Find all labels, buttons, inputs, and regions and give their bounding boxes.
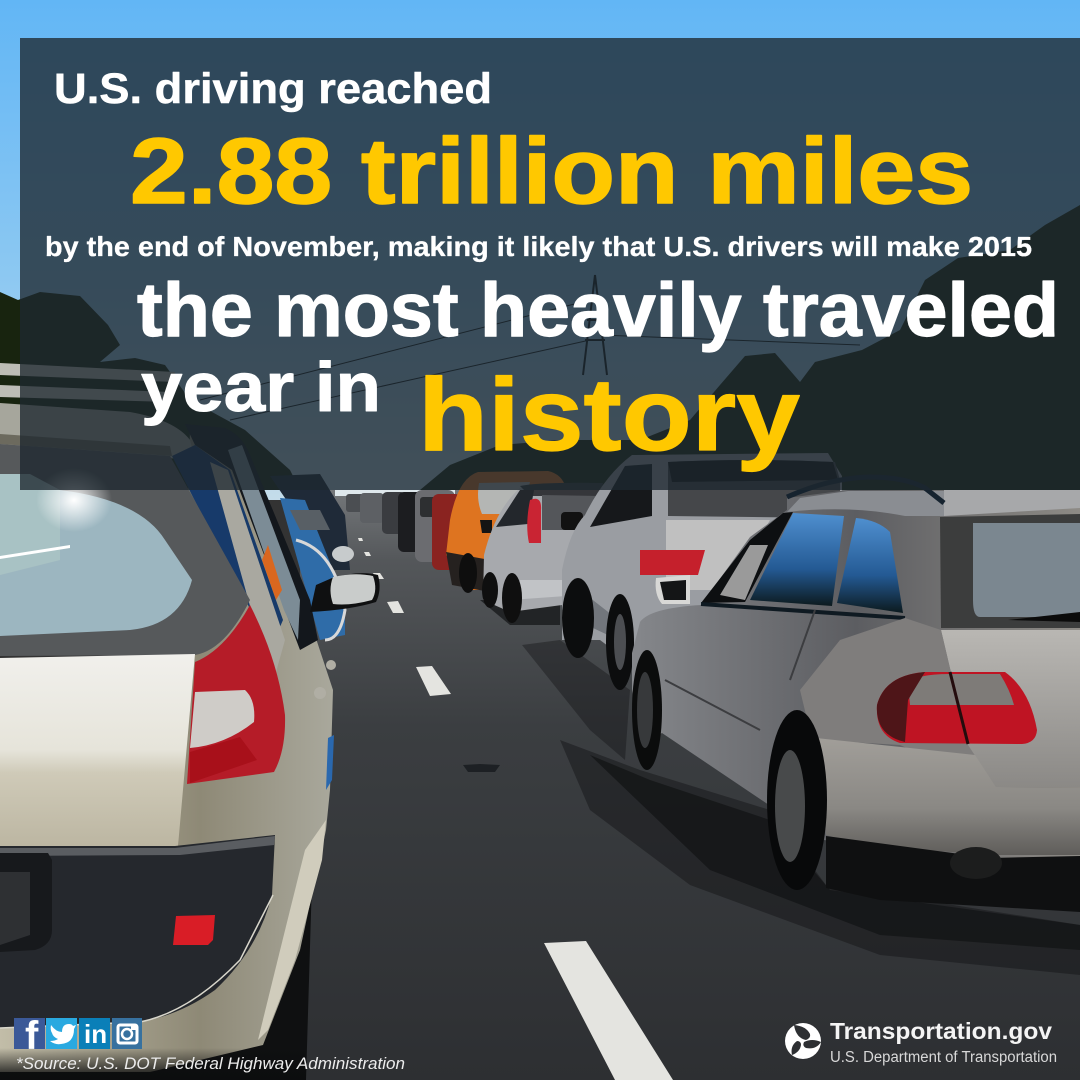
dark fade at bottom of left car [0, 1048, 306, 1080]
bright side reflection [258, 820, 326, 1040]
wheels [632, 650, 662, 770]
under-bumper [826, 836, 1080, 912]
orange van [446, 471, 566, 593]
sun glare [36, 468, 112, 532]
red reflector [173, 915, 215, 945]
big statistic: 2.88 trillion miles [130, 119, 973, 223]
side windows [750, 513, 844, 606]
shadows on road [480, 600, 1080, 975]
quarter panel [800, 618, 996, 787]
roof [0, 403, 195, 460]
wing mirror [310, 573, 380, 612]
source note: *Source: U.S. DOT Federal Highway Administration [16, 1055, 405, 1073]
tail light [187, 605, 285, 784]
website name: Transportation.gov [830, 1018, 1052, 1044]
far horizon strip [335, 490, 455, 496]
department name: U.S. Department of Transportation [830, 1049, 1057, 1066]
sky [0, 0, 1080, 500]
roof rail [787, 477, 944, 503]
distant cars right lane [346, 490, 462, 570]
tailgate [941, 630, 1080, 787]
bumper lower line [0, 895, 273, 1028]
logo: Transportation.gov [785, 1018, 1057, 1066]
roof [787, 491, 944, 516]
blue reflection [326, 735, 334, 790]
road [300, 490, 1080, 1080]
mid grey SUV [562, 453, 842, 690]
left car [0, 363, 336, 1072]
road dashes [358, 538, 673, 1080]
title text [45, 65, 1059, 472]
heading line 2: the most heavily traveled [137, 268, 1059, 353]
black bumper [0, 835, 275, 1028]
sub line: by the end of November, making it likely that U.S. drivers will make 2015 [45, 231, 1032, 262]
heading line 3: year in [141, 348, 381, 426]
power pylon and wires [200, 275, 860, 420]
highlighted word: history [418, 357, 800, 472]
body [632, 490, 1080, 860]
icon: instagram [112, 1018, 142, 1049]
left car shadow [0, 880, 312, 1080]
rear bumper [816, 738, 1080, 855]
side panel [0, 430, 333, 1072]
social media icons [14, 1014, 142, 1058]
blue pillar [172, 445, 283, 650]
front window opening [701, 512, 793, 603]
icon: twitter [46, 1018, 77, 1049]
tree line [0, 205, 1080, 500]
right silver estate car [632, 477, 1080, 912]
black roof pillar [185, 424, 318, 650]
door handles [326, 660, 336, 670]
heading line 1: U.S. driving reached [54, 65, 492, 113]
dark translucent title panel [20, 38, 1080, 490]
door creases [665, 610, 815, 730]
mirror [656, 575, 690, 604]
rear window [940, 514, 1080, 628]
icon: DOT triskelion [785, 1023, 821, 1059]
icon: linkedin: in [84, 1019, 107, 1049]
rear window [0, 444, 250, 656]
number plate recess [0, 853, 52, 952]
cars ahead of left car [270, 474, 354, 640]
side window [228, 445, 300, 640]
icon: facebook: f [25, 1014, 39, 1058]
roof rails [0, 363, 175, 402]
silver car ahead [482, 483, 603, 623]
road patch [463, 764, 500, 772]
window light reflection [0, 490, 192, 636]
tail light [877, 672, 1037, 744]
exhaust [950, 847, 1002, 879]
tailgate [0, 654, 195, 846]
